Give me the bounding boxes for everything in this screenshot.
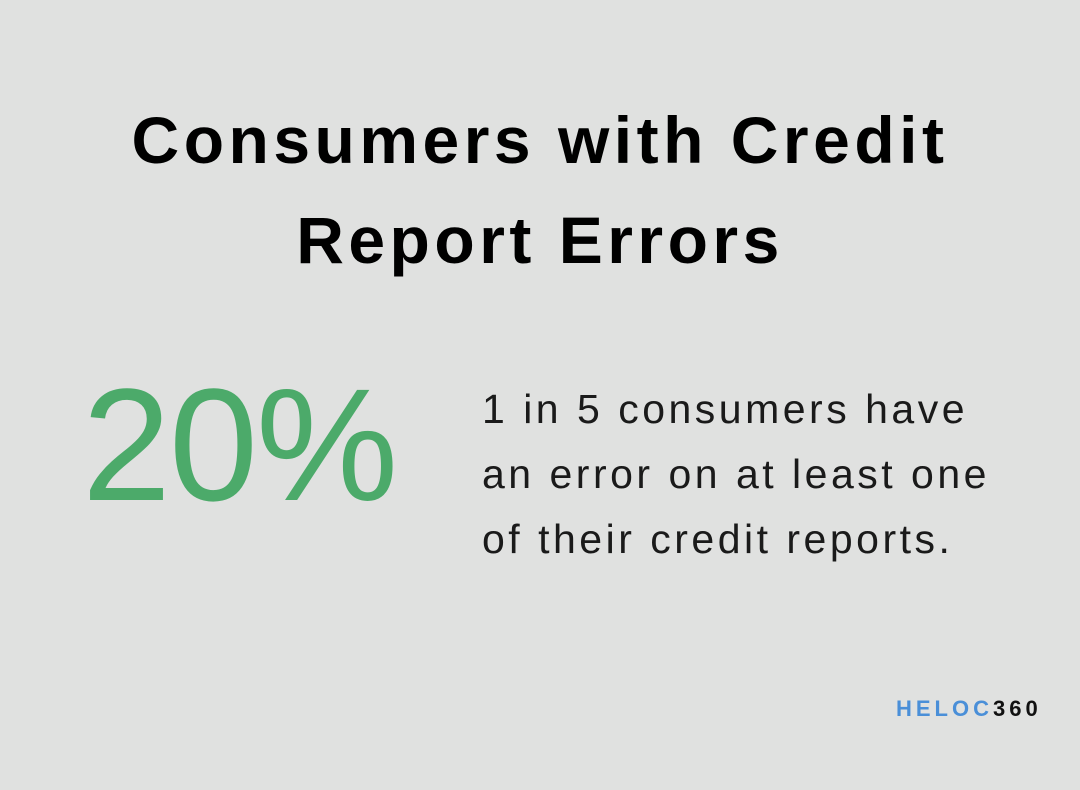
description text xyxy=(482,386,990,562)
logo: HELOC360: HELOC360 xyxy=(896,696,1042,721)
description text: an error on at least one xyxy=(482,451,990,497)
big statistic: 20%: 20% xyxy=(82,355,396,534)
description text: of their credit reports. xyxy=(482,516,953,562)
title xyxy=(132,103,948,277)
description text: 1 in 5 consumers have xyxy=(482,386,968,432)
title: Consumers with Credit xyxy=(132,103,948,177)
title: Report Errors xyxy=(296,203,784,277)
